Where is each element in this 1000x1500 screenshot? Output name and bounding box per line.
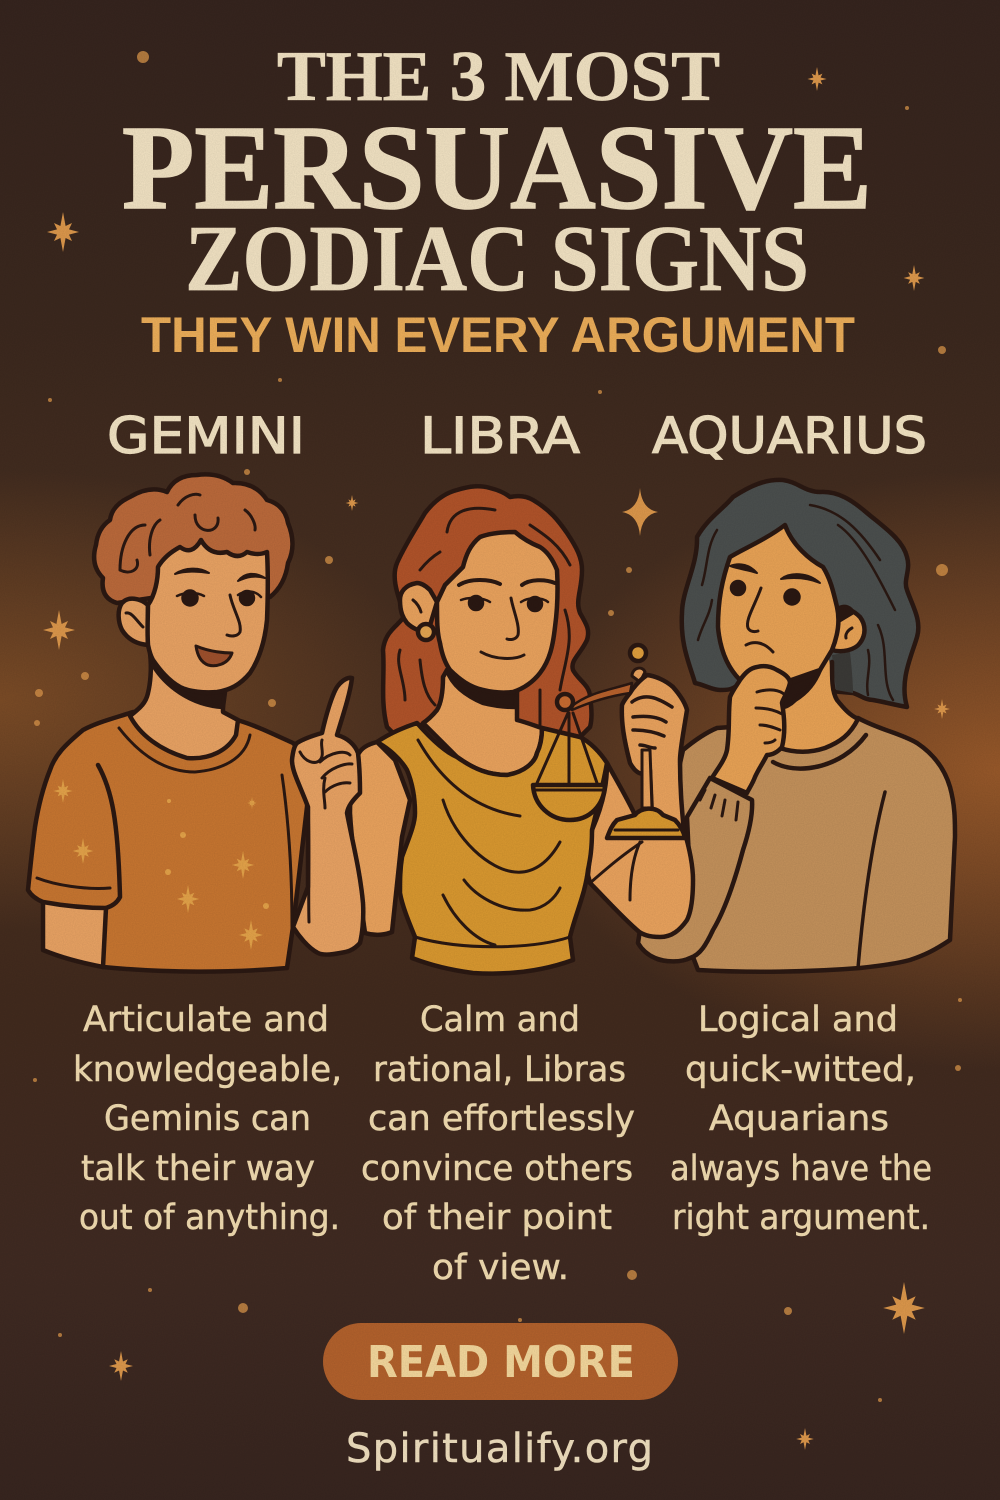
Gemini forearm and hand bbox=[292, 678, 363, 954]
Gemini sleeve cuff and shirt details bbox=[98, 765, 120, 908]
Libra hand and wrist bbox=[622, 675, 687, 832]
Gemini neck shadow bbox=[153, 665, 225, 707]
Aquarius hair bbox=[682, 480, 918, 707]
description: Libra: convince others bbox=[361, 1149, 633, 1189]
description: Libra: rational, Libras bbox=[373, 1050, 626, 1090]
scale top ball bbox=[630, 645, 646, 661]
Gemini hair curls bbox=[120, 494, 255, 572]
Aquarius sweater bbox=[640, 718, 955, 972]
title: ZODIAC SIGNS bbox=[185, 207, 809, 311]
Aquarius sleeve bbox=[638, 778, 752, 961]
Aquarius neck bbox=[770, 655, 858, 752]
description: Libra: can effortlessly bbox=[368, 1099, 635, 1139]
Libra top folds bbox=[415, 740, 570, 947]
Libra neck shadow bbox=[447, 670, 517, 707]
Gemini collar and hem lines bbox=[37, 728, 292, 927]
Gemini fingers bbox=[300, 740, 352, 922]
figure: Gemini bbox=[28, 474, 363, 972]
description: Libra bbox=[361, 1000, 635, 1288]
title bbox=[122, 38, 872, 311]
description: Gemini bbox=[73, 1000, 342, 1238]
Libra hair bbox=[383, 486, 592, 737]
title: PERSUASIVE bbox=[122, 101, 872, 235]
subtitle: THEY WIN EVERY ARGUMENT bbox=[141, 307, 855, 363]
Libra ear bbox=[400, 583, 437, 632]
scale strings bbox=[537, 713, 597, 783]
Aquarius features bbox=[730, 564, 885, 968]
scale pan bbox=[533, 785, 605, 820]
Libra left arm bbox=[350, 742, 410, 935]
description: Aquarius: Aquarians bbox=[709, 1099, 889, 1139]
scale beam bbox=[572, 683, 632, 710]
scale pole bbox=[642, 750, 652, 808]
Libra fingers bbox=[632, 697, 672, 748]
description: Gemini: knowledgeable, bbox=[73, 1050, 342, 1090]
description: Aquarius bbox=[670, 1000, 932, 1238]
Aquarius beard shadow bbox=[757, 670, 820, 707]
Gemini left forearm bbox=[43, 895, 110, 967]
description: Aquarius: right argument. bbox=[672, 1198, 930, 1238]
description: Gemini: talk their way bbox=[81, 1149, 315, 1189]
read more button bbox=[323, 1323, 678, 1400]
sign names: GEMINI bbox=[107, 407, 305, 465]
website: Spiritualify.org bbox=[346, 1426, 653, 1472]
scale top stem bbox=[632, 668, 645, 682]
Gemini face bbox=[148, 540, 268, 692]
Aquarius ear bbox=[832, 608, 864, 651]
Gemini hair bbox=[94, 474, 293, 603]
description: Libra: Calm and bbox=[420, 1000, 580, 1040]
description: Libra: of view. bbox=[432, 1248, 569, 1288]
Aquarius hand bbox=[712, 666, 790, 793]
Gemini features bbox=[126, 569, 265, 666]
Aquarius collar bbox=[773, 662, 866, 769]
description: Aquarius: quick-witted, bbox=[685, 1050, 916, 1090]
Libra hair strands bbox=[399, 508, 570, 725]
Gemini shirt bbox=[28, 712, 310, 972]
description: Aquarius: Logical and bbox=[698, 1000, 898, 1040]
Aquarius hand details bbox=[700, 690, 785, 820]
scale base bbox=[607, 809, 685, 838]
sign names bbox=[107, 407, 927, 465]
description: Gemini: out of anything. bbox=[79, 1198, 340, 1238]
title: THE 3 MOST bbox=[277, 38, 720, 116]
scale pivot bbox=[557, 694, 573, 710]
description: Aquarius: always have the bbox=[670, 1149, 932, 1189]
Aquarius face bbox=[718, 525, 838, 692]
Libra face bbox=[437, 532, 558, 693]
Gemini ear bbox=[119, 599, 148, 645]
Gemini neck bbox=[130, 653, 238, 758]
Libra features bbox=[413, 580, 555, 658]
Libra neck bbox=[423, 670, 542, 775]
description: Gemini: Articulate and bbox=[83, 1000, 329, 1040]
Gemini shirt stars bbox=[53, 779, 269, 950]
Libra right arm bbox=[588, 763, 693, 937]
Libra arm crease bbox=[590, 842, 642, 900]
description: Gemini: Geminis can bbox=[104, 1099, 311, 1139]
figure: Aquarius bbox=[638, 480, 955, 972]
read more button: READ MORE bbox=[367, 1337, 635, 1388]
sign names: AQUARIUS bbox=[652, 407, 927, 465]
Aquarius hair strands bbox=[698, 505, 895, 700]
figure: Libra bbox=[350, 486, 693, 974]
Aquarius hair shadow bbox=[832, 652, 853, 693]
Libra top bbox=[377, 723, 607, 974]
sign names: LIBRA bbox=[420, 407, 580, 465]
description: Libra: of their point bbox=[382, 1198, 612, 1238]
scale of justice bbox=[533, 645, 685, 838]
Libra earring bbox=[418, 624, 434, 640]
